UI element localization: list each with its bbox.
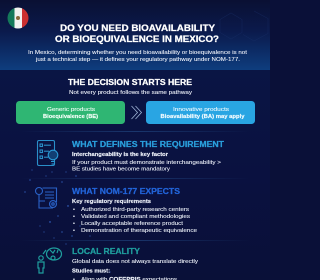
section text: local reality xyxy=(72,259,198,280)
section text: key regulatory requirements xyxy=(72,199,197,234)
section text: key regulatory requirements: • xyxy=(73,207,75,213)
section text: key regulatory requirements: Authorized third-party research centers xyxy=(81,207,189,213)
section text: key regulatory requirements: • xyxy=(73,221,75,227)
section text: key regulatory requirements: • xyxy=(73,228,75,234)
arrow: chevrons xyxy=(132,106,142,119)
section text: key regulatory requirements: Demonstration of therapeutic equivalence xyxy=(81,228,197,234)
icon: checklist with lightbulb xyxy=(38,140,58,166)
section text: key regulatory requirements: • xyxy=(73,214,75,220)
title xyxy=(55,23,219,44)
section heading: what defines the requirement: WHAT DEFINES THE REQUIREMENT xyxy=(72,140,224,149)
page background xyxy=(0,70,270,280)
section heading: what NOM-177 expects: WHAT NOM-177 EXPECTS xyxy=(72,187,181,196)
panel: innovative products: Innovative products xyxy=(173,107,229,113)
icon: document with gear and wrench xyxy=(36,188,56,208)
panel: generic products: Generic products xyxy=(47,107,95,113)
heading: the decision starts here: THE DECISION STARTS HERE xyxy=(68,78,193,87)
panel: generic products xyxy=(16,101,125,124)
icon: person with thought bubble xyxy=(38,248,62,273)
section text: requirement: BE studies have become mandatory xyxy=(72,166,170,172)
section text: local reality: Global data does not always translate directly xyxy=(72,259,198,265)
heading: the decision starts here xyxy=(68,78,193,96)
heading: the decision starts here: Not every product follows the same pathway xyxy=(69,90,192,96)
panel: innovative products xyxy=(146,101,255,124)
starfield dots xyxy=(24,170,110,272)
intro text xyxy=(28,50,248,63)
title: DO YOU NEED BIOAVAILABILITY xyxy=(60,23,215,33)
section text: local reality: Studies must: xyxy=(72,268,110,274)
section text: key regulatory requirements: Key regulatory requirements xyxy=(72,199,151,205)
section text: key regulatory requirements: Locally acceptable reference product xyxy=(81,221,184,227)
section text: requirement: Interchangeability is the key factor xyxy=(72,152,168,158)
icon: Mexican flag xyxy=(7,7,29,29)
section text: requirement: If your product must demonstrate interchangeability > xyxy=(72,160,221,166)
section text: requirement xyxy=(72,152,221,172)
header band xyxy=(0,0,270,70)
intro text: just a technical step — it defines your regulatory pathway under NOM-177. xyxy=(35,57,241,63)
title: OR BIOEQUIVALENCE IN MEXICO? xyxy=(55,34,219,44)
panel: innovative products: Bioavailability (BA) may apply xyxy=(160,114,245,120)
panel: generic products: Bioequivalence (BE) xyxy=(43,114,98,120)
intro text: In Mexico, determining whether you need bioavailability or bioequivalence is not xyxy=(28,50,248,56)
section heading: local reality: LOCAL REALITY xyxy=(72,247,141,256)
section text: key regulatory requirements: Validated and compliant methodologies xyxy=(81,214,190,220)
